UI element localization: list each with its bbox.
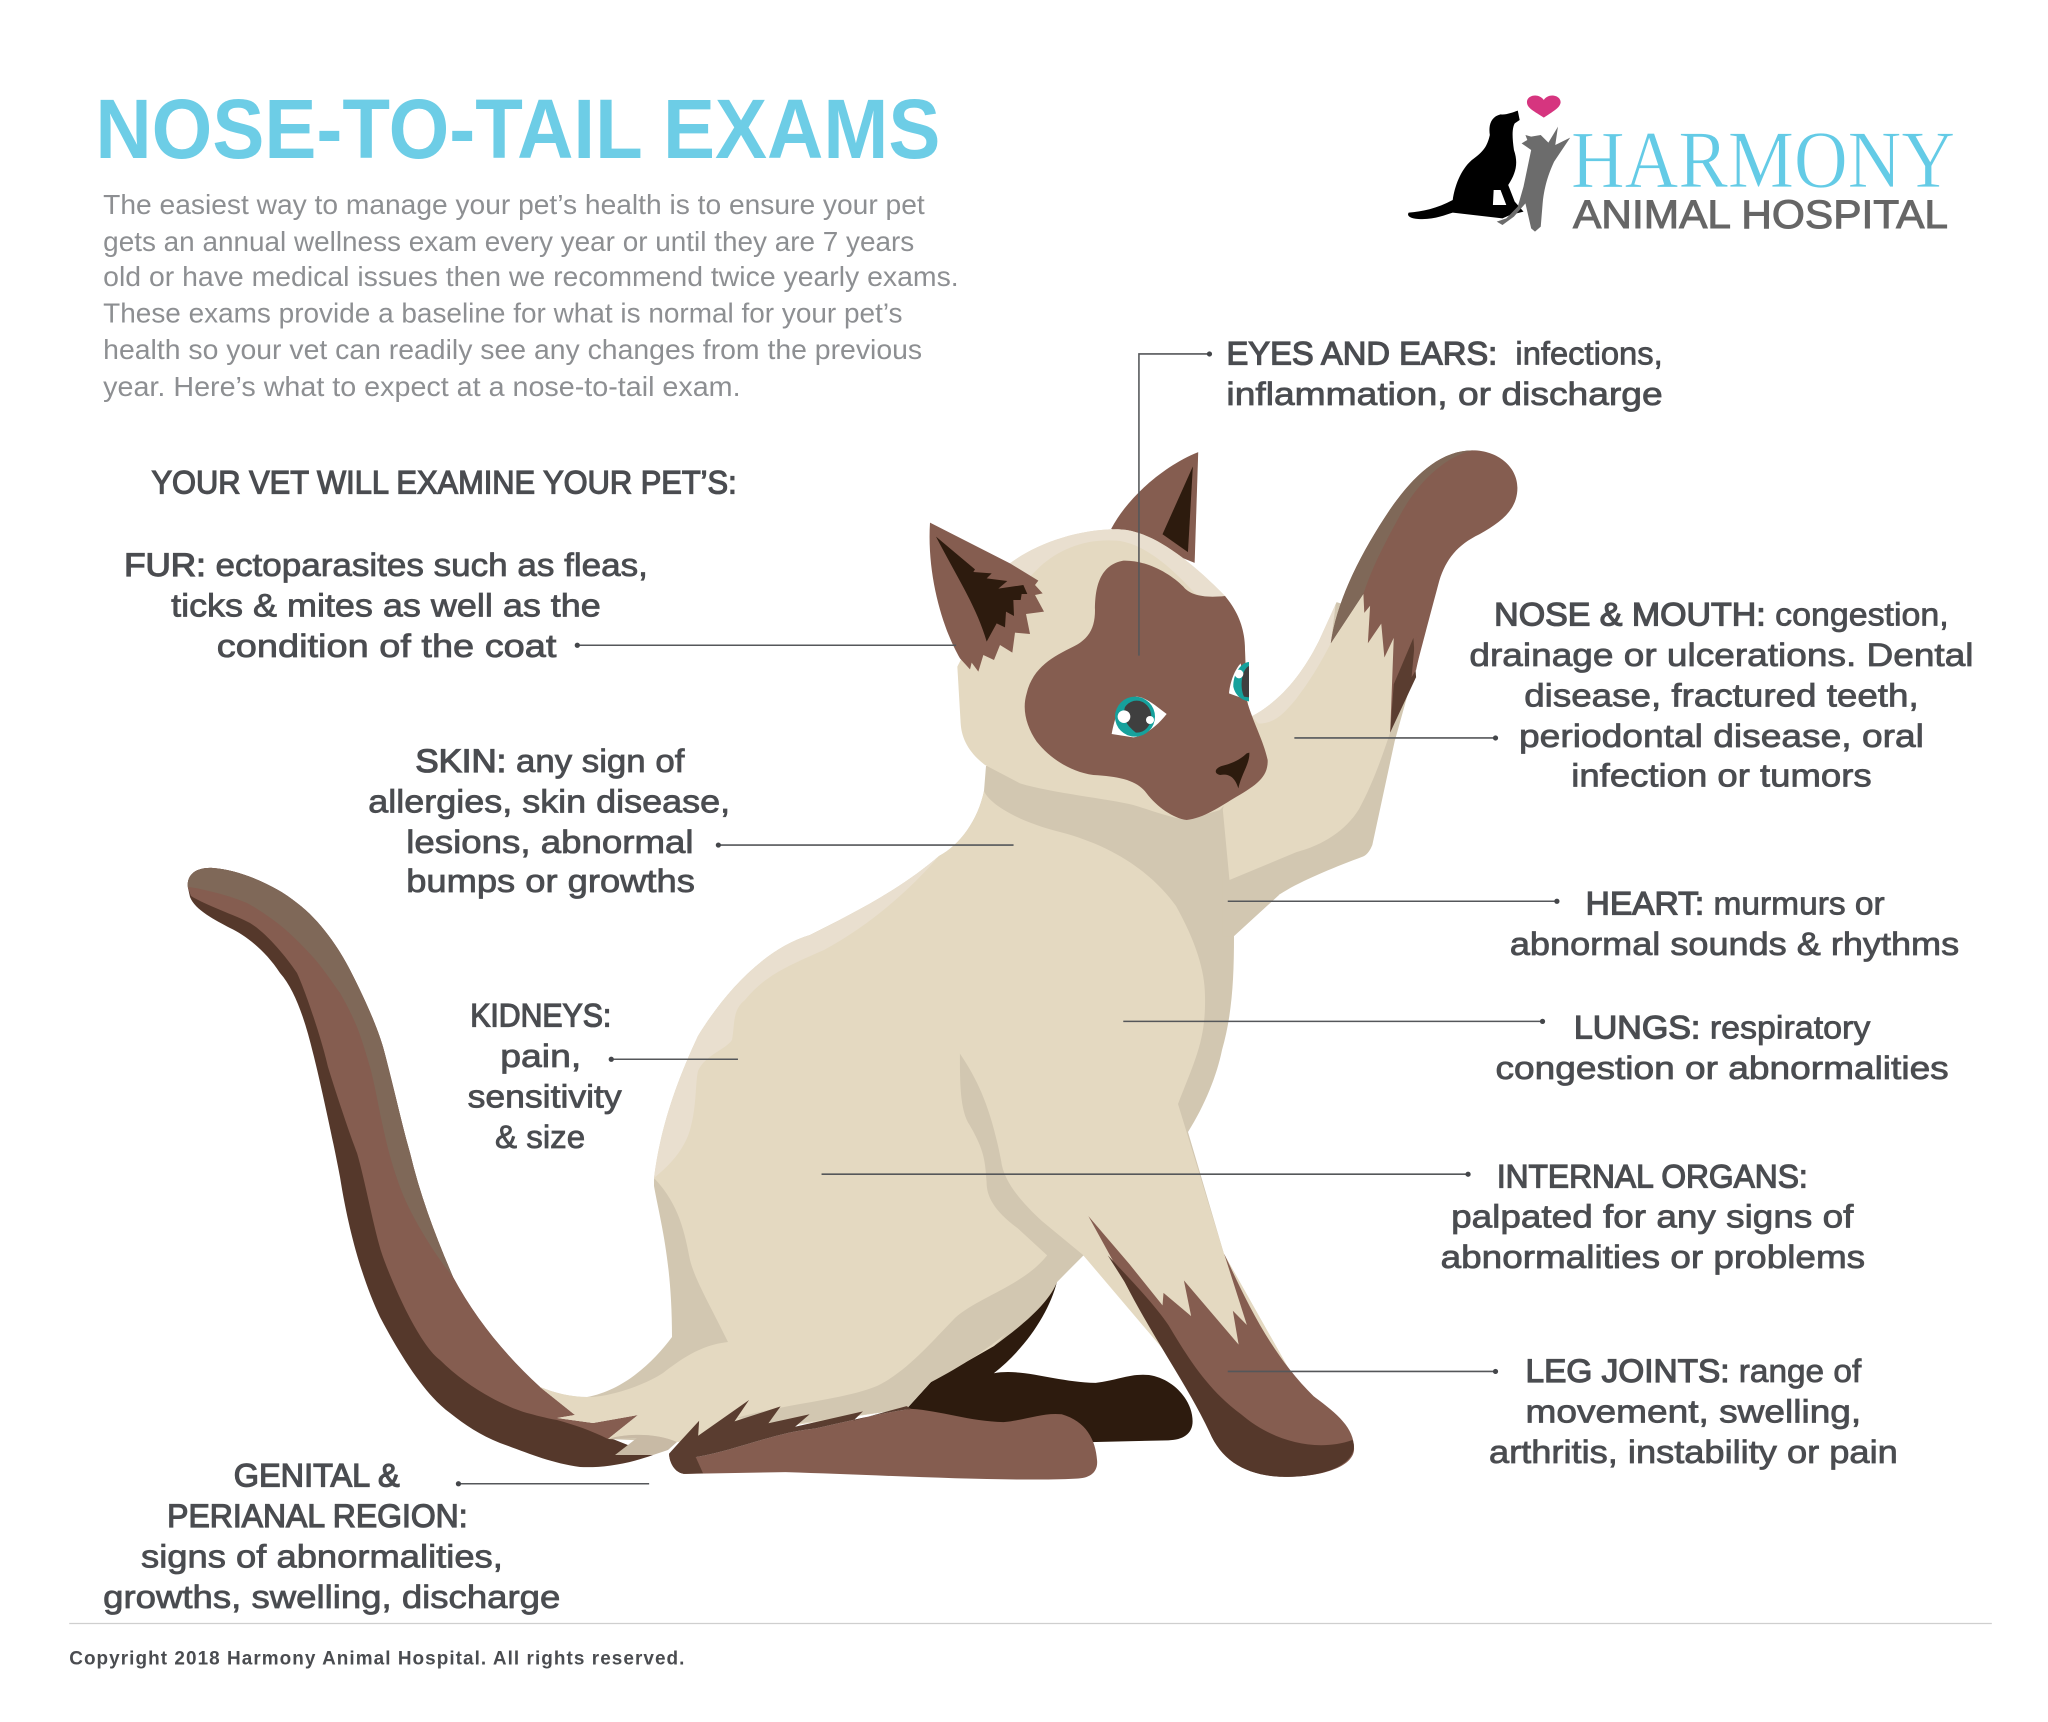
label: leg joints: movement, swelling, — [1526, 1392, 1861, 1429]
label: kidneys: pain, — [500, 1037, 581, 1074]
label: fur: FUR: ectoparasites such as fleas, — [124, 546, 648, 583]
label: genital and perianal: signs of abnormalities, — [141, 1537, 503, 1574]
label: skin: allergies, skin disease, — [368, 782, 730, 819]
cat illustration — [188, 450, 1517, 1480]
title: NOSE-TO-TAIL EXAMS — [95, 81, 940, 176]
label: heart: abnormal sounds & rhythms — [1510, 925, 1959, 962]
label: skin: SKIN: any sign of — [415, 742, 685, 779]
body cream — [540, 791, 1290, 1442]
logo subtitle: ANIMAL HOSPITAL — [1573, 193, 1948, 237]
near front leg — [1088, 1216, 1354, 1477]
logo name: HARMONY — [1571, 114, 1955, 205]
intro text: The easiest way to manage your pet’s health is to ensure your pet — [103, 189, 925, 220]
label: internal organs: abnormalities or problems — [1441, 1238, 1865, 1275]
label: kidneys — [468, 997, 622, 1155]
label: leg joints — [1489, 1352, 1898, 1470]
label: genital and perianal: GENITAL & — [234, 1456, 400, 1493]
label: lungs — [1496, 1008, 1949, 1086]
label: leg joints: arthritis, instability or pain — [1489, 1433, 1898, 1470]
label: heart — [1510, 884, 1959, 962]
far ear — [1111, 452, 1198, 563]
icon: dog — [1408, 111, 1524, 219]
label: nose and mouth — [1469, 596, 1974, 793]
head shape — [957, 529, 1267, 820]
intro text — [103, 189, 959, 402]
head highlight — [1010, 529, 1225, 597]
tail — [188, 868, 653, 1467]
body shadow — [540, 750, 1290, 1442]
intro text: gets an annual wellness exam every year or until they are 7 years — [103, 226, 914, 257]
icon: heart — [1527, 95, 1561, 118]
label: eyes and ears: EYES AND EARS: infections, — [1226, 334, 1663, 371]
label: fur — [124, 546, 648, 664]
near ear — [930, 523, 1044, 672]
label: kidneys: KIDNEYS: — [470, 997, 611, 1034]
haunch and leg shading — [737, 1054, 1084, 1425]
head — [930, 523, 1268, 820]
label: internal organs: INTERNAL ORGANS: — [1497, 1157, 1808, 1194]
intro text: health so your vet can readily see any changes from the previous — [103, 334, 922, 365]
label: genital and perianal: PERIANAL REGION: — [167, 1497, 468, 1534]
leader lines — [456, 351, 1560, 1486]
intro text: year. Here’s what to expect at a nose-to-tail exam. — [103, 371, 741, 402]
label: internal organs: palpated for any signs of — [1451, 1198, 1854, 1235]
icon: cat — [1497, 127, 1570, 232]
near hind paw — [669, 1400, 1097, 1480]
far eye — [1229, 662, 1249, 701]
label: lungs: congestion or abnormalities — [1496, 1049, 1949, 1086]
label: nose and mouth: NOSE & MOUTH: congestion, — [1494, 596, 1949, 633]
nose — [1216, 753, 1249, 788]
label: genital and perianal: growths, swelling, discharge — [103, 1578, 560, 1615]
near eye — [1112, 697, 1167, 737]
label: kidneys: sensitivity — [468, 1078, 622, 1115]
text labels — [103, 334, 1974, 1615]
label: genital and perianal — [103, 1456, 560, 1615]
back highlight — [654, 856, 939, 1178]
label: skin: bumps or growths — [406, 862, 695, 899]
label: lungs: LUNGS: respiratory — [1574, 1008, 1871, 1045]
label: heart: HEART: murmurs or — [1586, 884, 1885, 921]
label: skin — [368, 742, 730, 899]
logo — [1408, 95, 1955, 237]
raised paw and arm — [1223, 450, 1517, 936]
intro text: old or have medical issues then we recommend twice yearly exams. — [103, 261, 959, 292]
label: skin: lesions, abnormal — [406, 823, 694, 860]
far hind leg — [907, 1282, 1193, 1443]
label: nose and mouth: infection or tumors — [1571, 756, 1872, 793]
label: eyes and ears: inflammation, or discharge — [1226, 375, 1663, 412]
label: fur: ticks & mites as well as the — [171, 586, 601, 623]
label: nose and mouth: periodontal disease, oral — [1519, 717, 1924, 754]
face mask — [1025, 561, 1268, 820]
copyright: Copyright 2018 Harmony Animal Hospital. All rights reserved. — [69, 1649, 684, 1670]
fur shadow patch — [608, 1435, 677, 1455]
label: internal organs — [1441, 1157, 1865, 1275]
heading: your vet will examine: YOUR VET WILL EXAMINE YOUR PET’S: — [152, 464, 737, 501]
label: nose and mouth: disease, fractured teeth, — [1524, 677, 1919, 714]
label: nose and mouth: drainage or ulcerations. Dental — [1469, 636, 1974, 673]
intro text: These exams provide a baseline for what is normal for your pet’s — [103, 298, 903, 329]
label: leg joints: LEG JOINTS: range of — [1526, 1352, 1862, 1389]
label: kidneys: & size — [495, 1118, 585, 1155]
label: eyes and ears — [1226, 334, 1663, 412]
label: fur: condition of the coat — [217, 627, 556, 664]
